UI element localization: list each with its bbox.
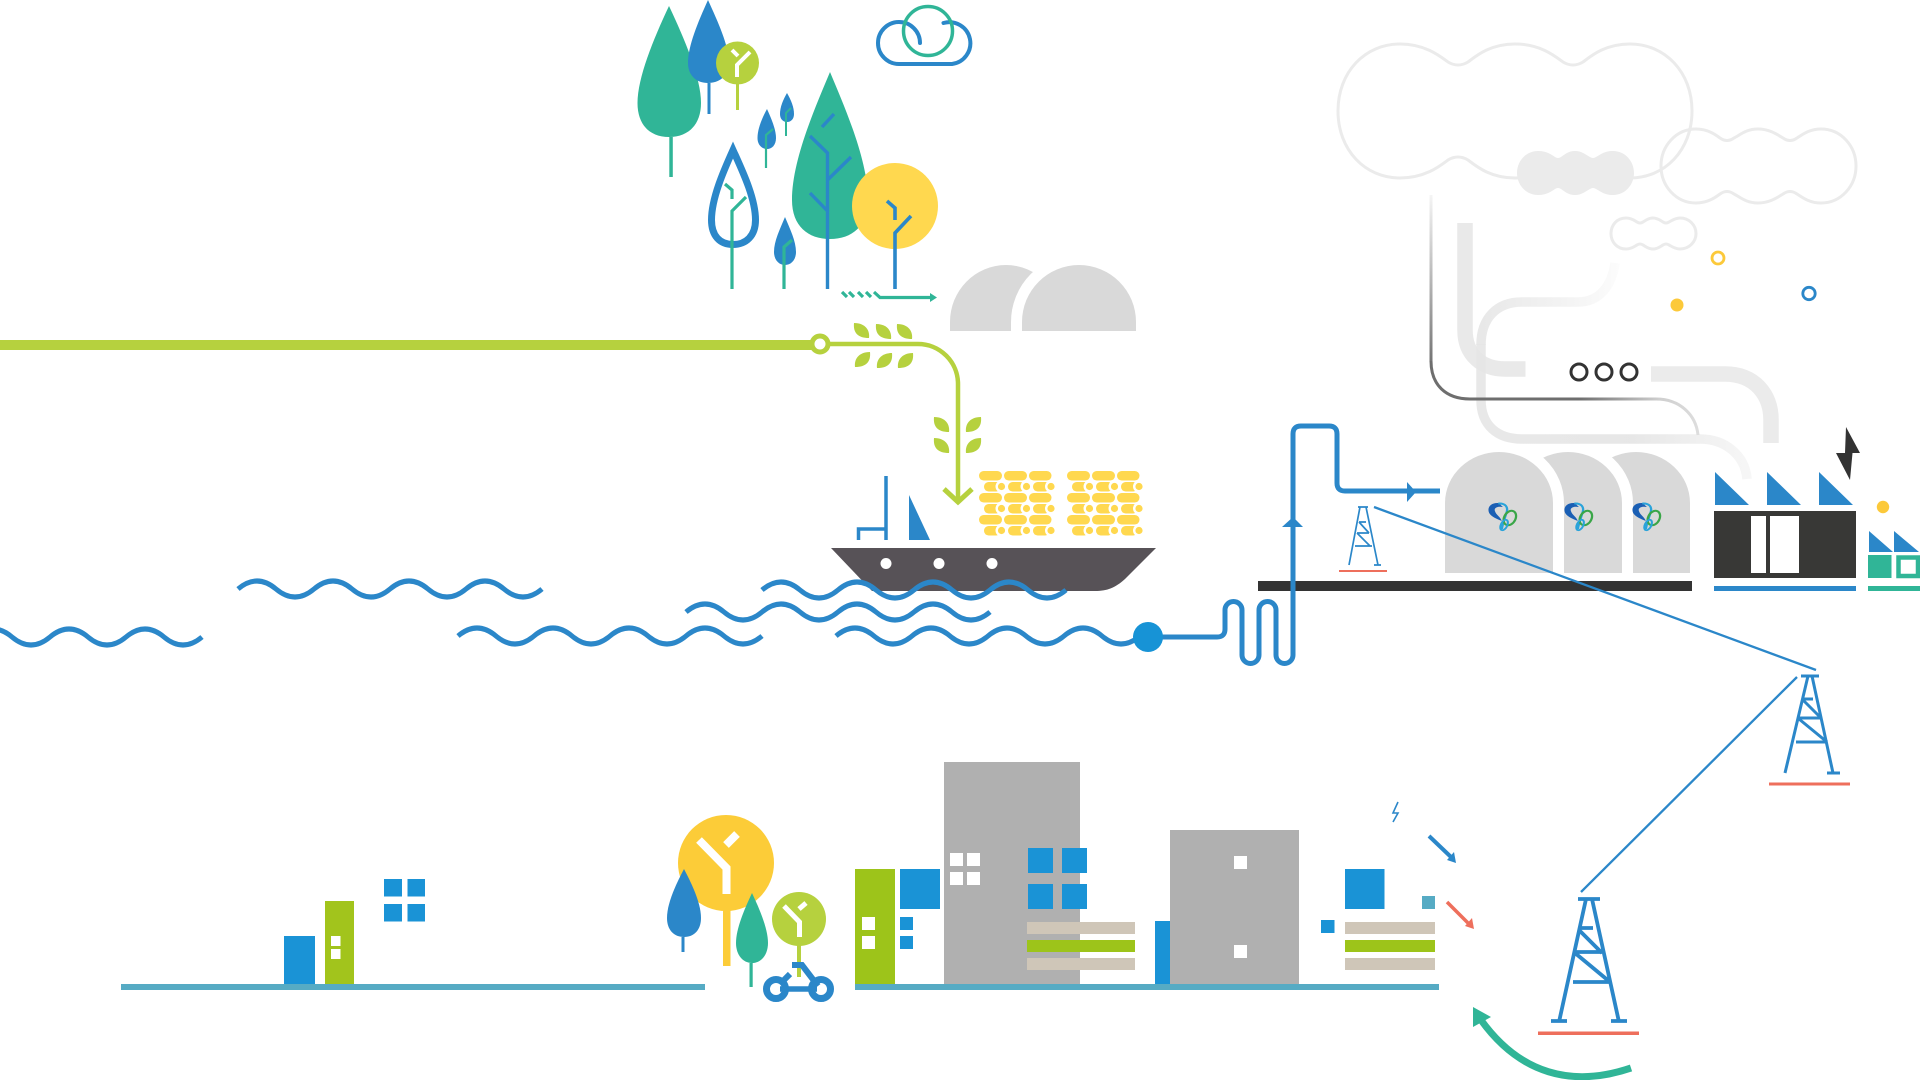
wide grey building	[1170, 830, 1299, 984]
dots: floating yellow and blue	[1670, 252, 1815, 312]
tree: small blue sapling	[758, 109, 776, 168]
grey domes: upper pair	[950, 265, 1140, 343]
central blue squares	[900, 869, 940, 949]
icon: bicycle	[766, 965, 830, 998]
tree: blue poplar	[688, 0, 729, 114]
arrow: green dashed arrow	[842, 292, 937, 302]
pipe: thin dark vertical	[1430, 195, 1432, 362]
power line: tower to tower	[1374, 507, 1816, 670]
blue pipe with node and arrows	[1133, 426, 1440, 664]
thick lime pipeline	[0, 340, 815, 350]
blue window grid on tall building	[1028, 848, 1087, 909]
tree: outlined blue teardrop	[712, 150, 756, 289]
tree: large green poplar	[638, 6, 701, 177]
ground line right	[855, 984, 1439, 990]
central green building	[855, 869, 895, 984]
tall grey building	[944, 762, 1080, 984]
icon: small blue lightning	[1393, 802, 1398, 822]
icon: small transmission tower	[1339, 507, 1387, 572]
cargo: corn stack right	[1067, 471, 1145, 536]
left neighbourhood buildings	[284, 901, 354, 984]
icon: dome logo 2	[1564, 503, 1594, 531]
pipe: winding pale top	[1481, 263, 1615, 345]
left blue window grid	[384, 879, 425, 922]
factory: large dark	[1714, 472, 1856, 591]
icon: large transmission tower	[1538, 899, 1639, 1035]
dot: yellow	[1877, 501, 1889, 513]
cloud: large outline	[1338, 44, 1692, 178]
power line: lower	[1581, 677, 1797, 892]
pipe: thin dark horizontal	[1431, 361, 1698, 435]
cloud: filled grey	[1517, 151, 1634, 195]
ship	[831, 476, 1156, 591]
striped bars centre	[1027, 922, 1135, 970]
lime branch arrow with valve	[812, 336, 972, 502]
tree: lime round	[716, 42, 759, 110]
arrow: red diagonal	[1447, 902, 1474, 929]
tree: small blue with green stem	[774, 217, 796, 289]
leaves on lime branch	[854, 323, 981, 453]
arrow: blue diagonal	[1429, 836, 1456, 863]
pale pipes	[1431, 195, 1771, 479]
icon: dark lightning bolt	[1836, 427, 1860, 480]
waves	[0, 581, 1148, 645]
striped bars right	[1345, 922, 1435, 970]
cargo: corn stack left	[979, 471, 1057, 536]
tree: tall green with blue branches	[792, 72, 868, 289]
ship sail	[909, 495, 930, 540]
arrow: green curved	[1473, 1007, 1631, 1077]
ground line left	[121, 984, 705, 990]
ship portholes	[880, 558, 998, 569]
cloud: small outline	[1611, 218, 1696, 249]
blue narrow building	[1155, 921, 1170, 984]
icon: dome logo 1	[1488, 503, 1518, 531]
icon: medium transmission tower	[1769, 676, 1850, 786]
icon: dome logo 3	[1632, 503, 1662, 531]
dark platform bar	[1258, 581, 1692, 591]
dark rings	[1571, 364, 1637, 380]
tree: lime urban	[772, 892, 826, 977]
tree: yellow round	[852, 163, 938, 289]
tree: green urban	[736, 893, 768, 987]
icon: cloud with ring	[878, 6, 970, 64]
tree: blue urban	[667, 869, 701, 952]
pipe: winding pale low	[1481, 344, 1747, 479]
grey domes: power plant	[1445, 452, 1690, 573]
tree: big yellow urban	[678, 815, 774, 966]
pipe: thick left elbow	[1465, 223, 1526, 369]
cloud: medium outline	[1661, 129, 1856, 203]
ship mast	[858, 476, 886, 540]
factory: small green	[1868, 531, 1920, 591]
ship hull	[831, 548, 1156, 591]
right blocks	[1321, 869, 1435, 933]
tree: tiny blue sapling	[780, 93, 794, 136]
pipe: thick right elbow	[1651, 374, 1771, 443]
